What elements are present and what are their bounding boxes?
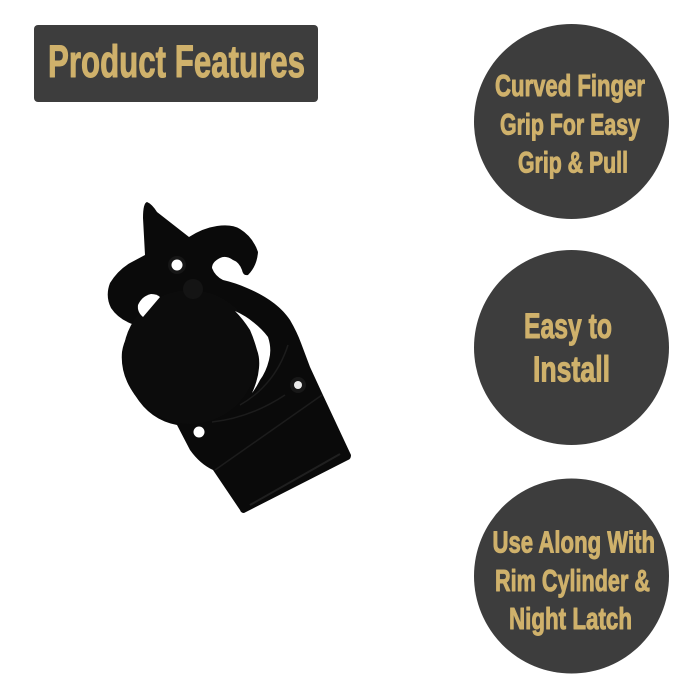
- crescent opening: [235, 311, 270, 393]
- heading: product features: [34, 25, 318, 102]
- product image: black door pull with fleur-de-lis top: [108, 202, 351, 513]
- raised ring and plate edge: [212, 345, 322, 470]
- mounting hole: top: [168, 256, 186, 274]
- feature circle: curved finger grip: [474, 24, 669, 219]
- feature circle: easy to install: Easy to: [524, 307, 612, 346]
- left slot opening: [138, 294, 160, 317]
- mounting hole: lower right: [290, 377, 306, 393]
- heading: product features: Product Features: [48, 36, 305, 87]
- mounting hole: lower left: [194, 426, 204, 438]
- feature circle: rim cylinder and night latch: [474, 478, 669, 674]
- feature circle: curved finger grip: Curved Finger: [495, 68, 645, 103]
- pivot rivet: [183, 279, 203, 299]
- feature circle: curved finger grip: Grip For Easy: [500, 108, 640, 142]
- feature circle: curved finger grip: Grip & Pull: [518, 146, 628, 180]
- feature circle: rim cylinder and night latch: Night Latch: [509, 601, 632, 636]
- feature circle: easy to install: Install: [533, 348, 610, 390]
- bottom edge highlight: [250, 454, 340, 505]
- feature circle: easy to install: [474, 250, 669, 445]
- cover disc: [123, 290, 257, 424]
